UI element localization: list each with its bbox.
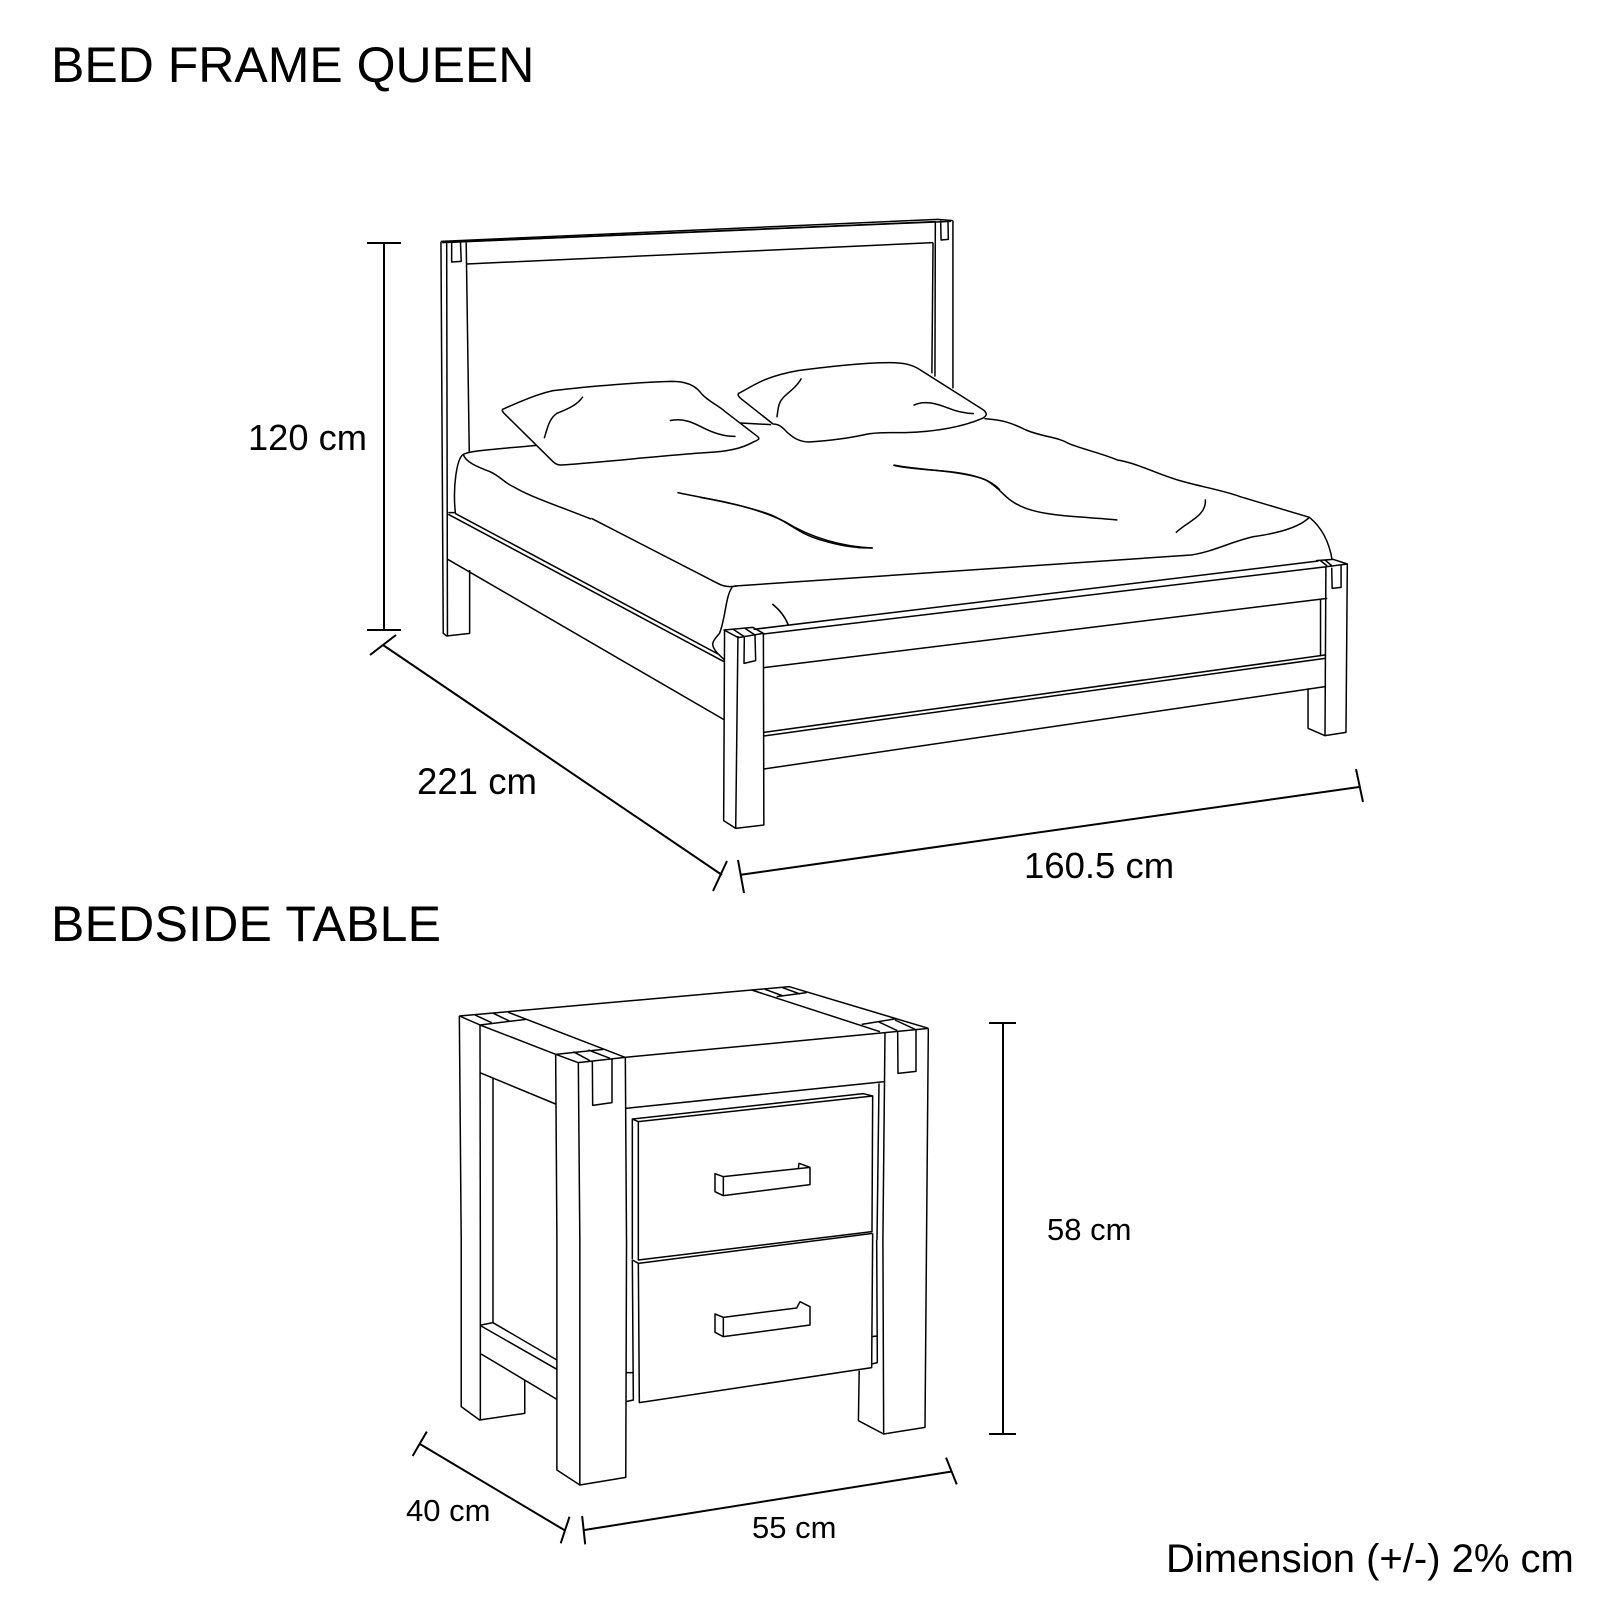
dimension: table depth: 40 cm bbox=[406, 1493, 490, 1528]
dimension: bed length bbox=[370, 635, 727, 891]
headboard bbox=[441, 219, 953, 636]
dimension: table width bbox=[582, 1458, 957, 1545]
mattress corner at headboard bbox=[448, 445, 591, 519]
dimension: bed width: 160.5 cm bbox=[1024, 845, 1174, 886]
table top and upper frame bbox=[459, 987, 928, 1240]
dimension: table height: 58 cm bbox=[1047, 1212, 1131, 1247]
note: dimension tolerance: Dimension (+/-) 2% cm bbox=[1166, 1537, 1574, 1581]
dimension: table width: 55 cm bbox=[752, 1510, 836, 1545]
dimension: bed width bbox=[738, 769, 1363, 893]
lower legs and stretcher bbox=[461, 1240, 927, 1485]
mattress and sheet folds bbox=[591, 423, 1000, 660]
footboard bbox=[700, 419, 1347, 828]
upper drawer handle bbox=[715, 1163, 810, 1196]
title: bedside table: BEDSIDE TABLE bbox=[51, 896, 441, 952]
dimension: bed height: 120 cm bbox=[248, 417, 367, 458]
side rail bbox=[448, 513, 725, 720]
upper drawer bbox=[632, 1094, 873, 1260]
dimension: table height bbox=[989, 1023, 1131, 1434]
lower drawer bbox=[626, 1233, 877, 1403]
footboard post top and crease bbox=[724, 604, 788, 663]
illustration: bed frame bbox=[441, 219, 1347, 828]
pillows bbox=[502, 363, 986, 465]
dimension: bed length: 221 cm bbox=[417, 761, 537, 802]
dimension: table depth bbox=[406, 1432, 570, 1543]
illustration: bedside table bbox=[459, 987, 928, 1485]
dimension: bed height bbox=[248, 243, 401, 630]
lower drawer handle bbox=[715, 1302, 810, 1337]
title: bed frame queen: BED FRAME QUEEN bbox=[51, 37, 534, 93]
